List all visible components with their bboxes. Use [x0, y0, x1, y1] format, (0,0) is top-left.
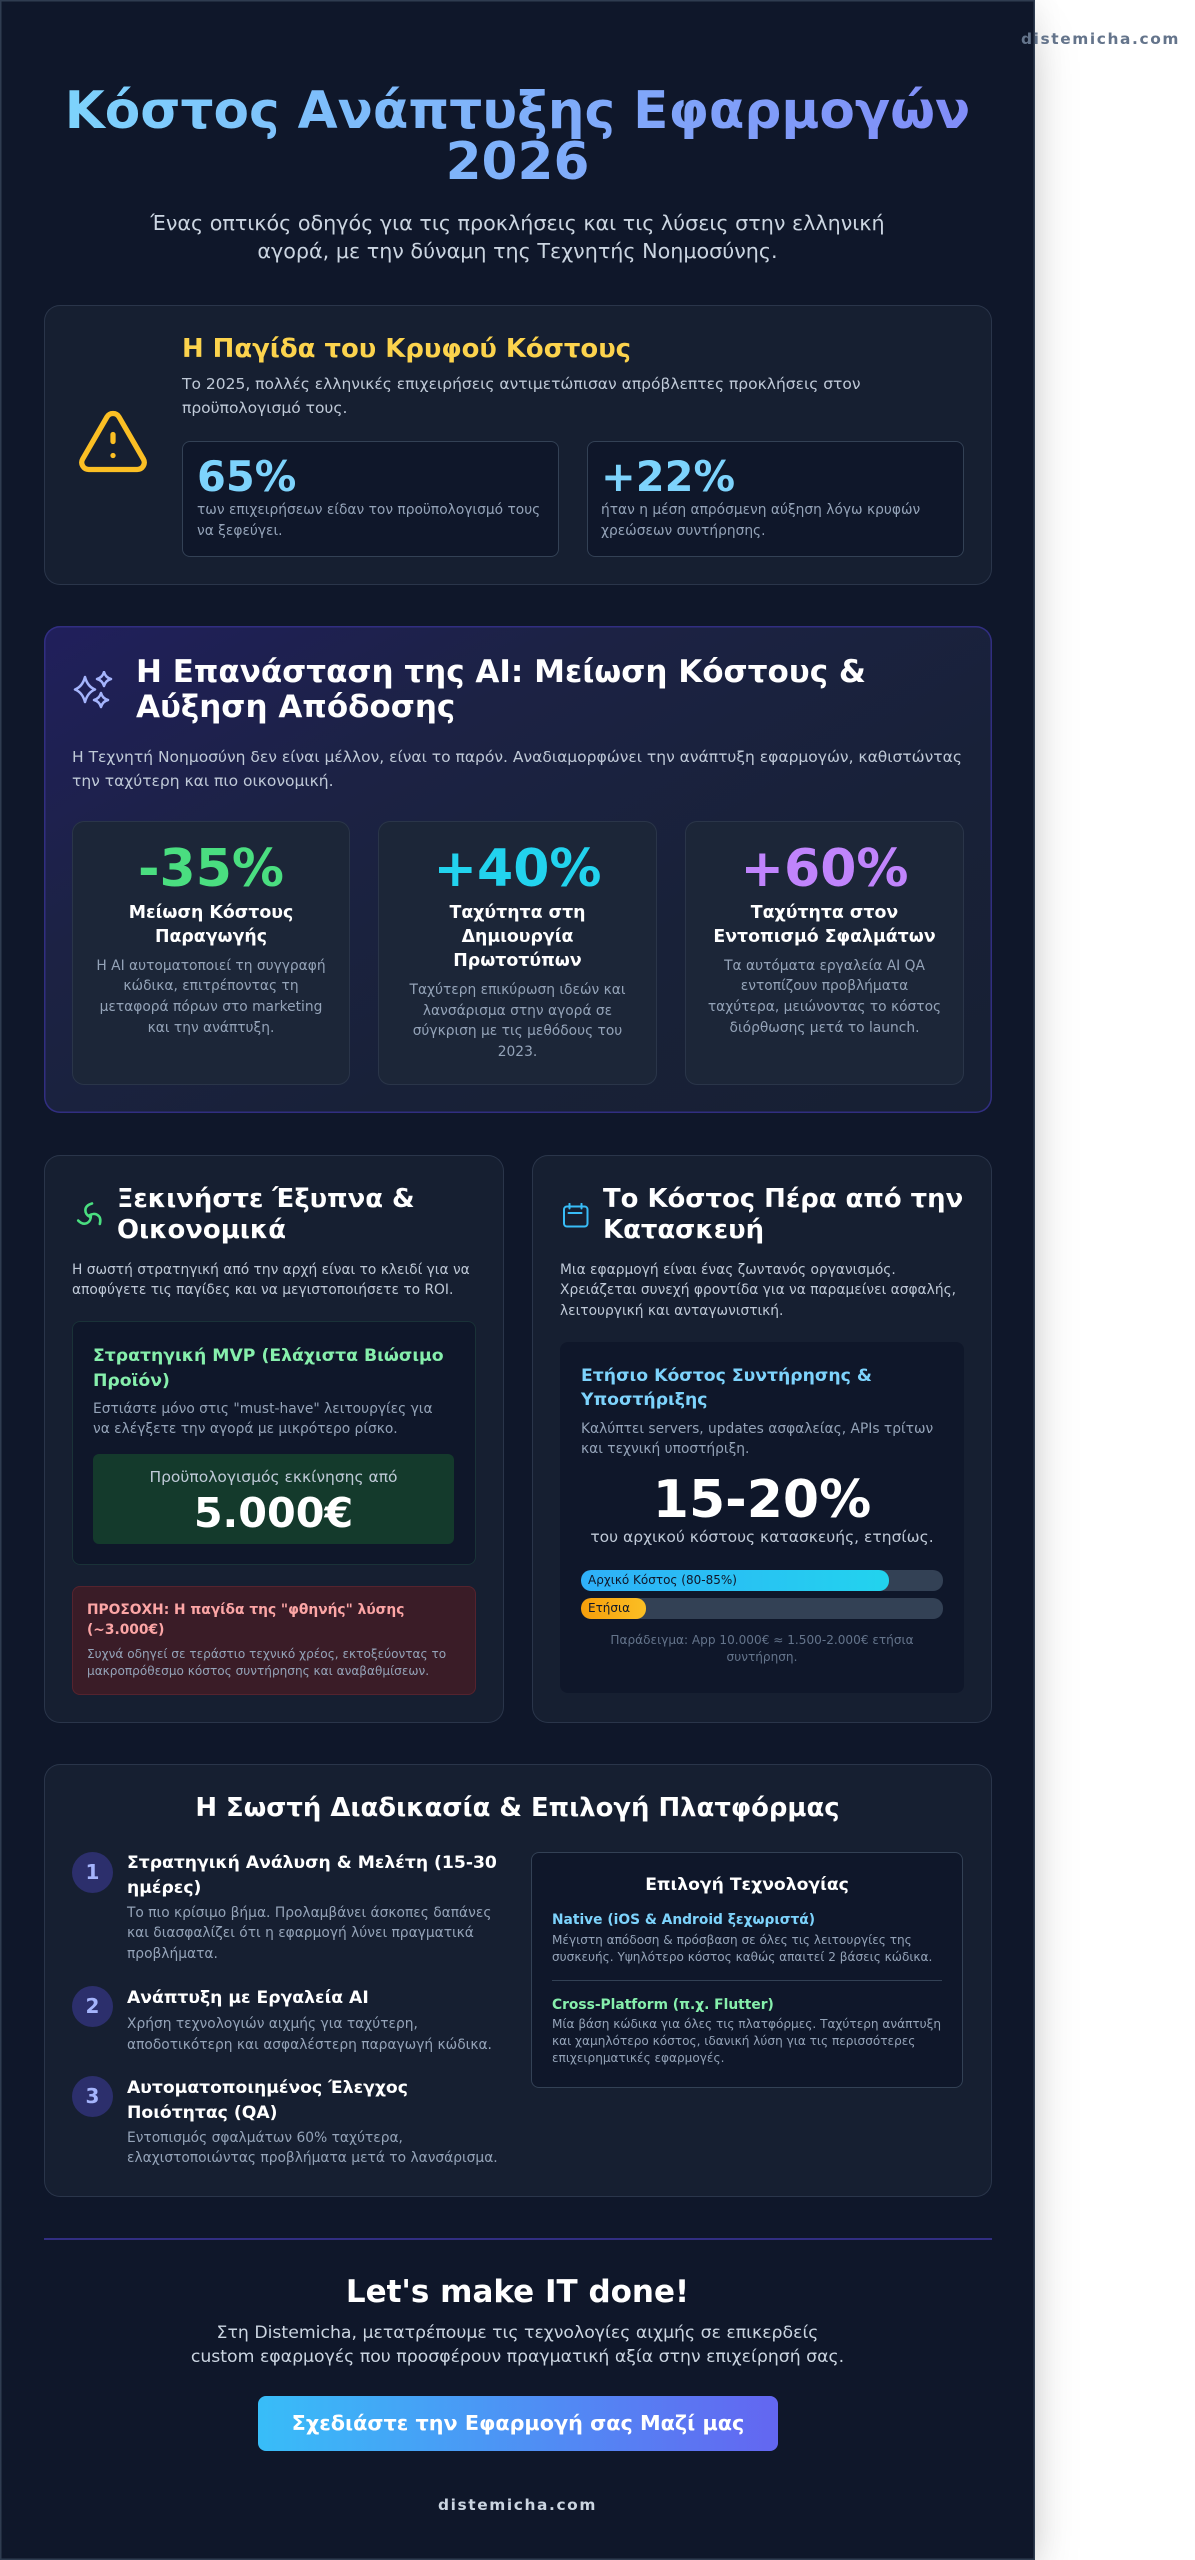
step title: Στρατηγική Ανάλυση & Μελέτη (15-30: [127, 1853, 497, 1873]
step description: αποδοτικότερη και ασφαλέστερη παραγωγή κώδικα.: [127, 2037, 492, 2053]
icon: fan swirl: [76, 1202, 102, 1226]
stat description: λανσάρισμα στην αγορά σε: [423, 1003, 612, 1019]
cta text: Στη Distemicha, μετατρέπουμε τις τεχνολογίες αιχμής σε επικερδείς: [217, 2322, 818, 2342]
icon: sparkles: [74, 671, 112, 708]
cta button: Σχεδιάστε την Εφαρμογή σας Μαζί μας: [292, 2411, 744, 2435]
text: annual cost description: [581, 1420, 933, 1457]
stat number: +22%: [601, 452, 735, 500]
step title: Αυτοματοποιημένος Έλεγχος: [127, 2078, 408, 2098]
warning heading: ΠΡΟΣΟΧΗ: Η παγίδα της "φθηνής" λύσης: [87, 1602, 404, 1618]
stat description: [708, 958, 941, 1036]
stat number: -35%: [138, 838, 284, 898]
stat label: Μείωση Κόστους: [129, 903, 293, 923]
title: 2026: [446, 132, 589, 192]
budget value: 5.000€: [194, 1489, 353, 1537]
stat description: μεταφορά πόρων στο marketing: [100, 999, 322, 1015]
stat description: [96, 958, 326, 1036]
stat card: prototyping speed: [378, 821, 657, 1085]
heading: cost beyond build: [603, 1184, 963, 1245]
title: Κόστος Ανάπτυξης Εφαρμογών: [65, 80, 970, 140]
heading: cost beyond build: Το Κόστος Πέρα από την: [603, 1184, 963, 1214]
step 2: [72, 1986, 492, 2053]
step title: Ποιότητας (QA): [127, 2103, 277, 2123]
stat description: σύγκριση με τις μεθόδους του: [413, 1023, 622, 1039]
stat card: bug detection speed: [685, 821, 964, 1085]
stat description: ταχύτερα, μειώνοντας το κόστος: [708, 999, 941, 1015]
text: strategy intro: [72, 1262, 470, 1298]
stat description: ήταν η μέση απρόσμενη αύξηση λόγω κρυφών: [601, 502, 920, 518]
stat description: Η AI αυτοματοποιεί τη συγγραφή: [96, 958, 326, 974]
stat card: cost reduction: [72, 821, 350, 1085]
icon: warning triangle: [79, 410, 147, 472]
bar fill: Ετήσια: [588, 1601, 630, 1615]
step title: Ανάπτυξη με Εργαλεία AI: [127, 1988, 369, 2008]
budget callout: [93, 1454, 454, 1544]
option title: cross-platform: Cross-Platform (π.χ. Flutter): [552, 1997, 774, 2013]
stat description: Τα αυτόματα εργαλεία AI QA: [724, 958, 925, 974]
text: annual cost description: Καλύπτει servers, updates ασφαλείας, APIs τρίτων: [581, 1420, 933, 1436]
step description: Εντοπισμός σφαλμάτων 60% ταχύτερα,: [127, 2130, 403, 2146]
budget label: Προϋπολογισμός εκκίνησης από: [149, 1468, 398, 1486]
heading: AI revolution: Η Επανάσταση της AI: Μείωση Κόστους &: [136, 654, 866, 690]
heading: cost beyond build: Κατασκευή: [603, 1215, 764, 1245]
option text: cross-platform: επιχειρηματικές εφαρμογές.: [552, 2051, 724, 2065]
warning heading: (~3.000€): [87, 1622, 164, 1638]
warning text: μακροπρόθεσμο κόστος συντήρησης και αναβαθμίσεων.: [87, 1664, 429, 1678]
footer brand: distemicha.com: [438, 2496, 597, 2514]
step description: ελαχιστοποιώντας προβλήματα μετά το λανσάρισμα.: [127, 2150, 498, 2166]
heading: annual cost: Υποστήριξης: [581, 1390, 707, 1410]
text: maintenance intro: λειτουργική και ανταγωνιστική.: [560, 1303, 783, 1319]
stat label: [713, 903, 936, 947]
heading: MVP: [93, 1346, 444, 1390]
caption: του αρχικού κόστους κατασκευής, ετησίως.: [590, 1528, 934, 1546]
step title: [127, 1853, 497, 1898]
heading: AI revolution: Αύξηση Απόδοσης: [136, 689, 455, 725]
panel: process and platform: [44, 1764, 992, 2197]
example note: [610, 1633, 914, 1664]
panel: hidden cost trap: [44, 305, 992, 585]
step description: [127, 2130, 498, 2166]
heading: start smart: Οικονομικά: [117, 1215, 286, 1245]
stat label: Πρωτοτύπων: [453, 951, 582, 971]
card: annual maintenance cost: [560, 1342, 964, 1693]
text: AI intro: την ταχύτερη και πιο οικονομική.: [72, 772, 334, 790]
text: MVP description: Εστιάστε μόνο στις "must-have" λειτουργίες για: [93, 1401, 433, 1417]
stat number: 65%: [197, 452, 296, 500]
option text: cross-platform: [552, 2017, 941, 2065]
text: annual cost description: και τεχνική υποστήριξη.: [581, 1441, 749, 1457]
heading: MVP: Στρατηγική MVP (Ελάχιστα Βιώσιμο: [93, 1346, 444, 1366]
step number: [72, 2076, 113, 2117]
cta heading: Let's make IT done!: [346, 2274, 689, 2310]
stat label: Παραγωγής: [155, 927, 267, 947]
stat description: 2023.: [498, 1044, 537, 1060]
option text: native: Μέγιστη απόδοση & πρόσβαση σε όλες τις λειτουργίες της: [552, 1933, 912, 1947]
step number: 1: [86, 1860, 99, 1884]
stat description: Ταχύτερη επικύρωση ιδεών και: [410, 982, 625, 998]
text: maintenance intro: Χρειάζεται συνεχή φροντίδα για να παραμείνει ασφαλής,: [560, 1282, 956, 1298]
warning text: Συχνά οδηγεί σε τεράστιο τεχνικό χρέος, εκτοξεύοντας το: [87, 1647, 446, 1661]
heading: annual cost: Ετήσιο Κόστος Συντήρησης &: [581, 1366, 872, 1386]
example note: συντήρηση.: [727, 1650, 797, 1664]
stat description: χρεώσεων συντήρησης.: [601, 523, 766, 539]
example note: Παράδειγμα: App 10.000€ ≈ 1.500-2.000€ ετήσια: [610, 1633, 914, 1647]
cta text: custom εφαρμογές που προσφέρουν πραγματική αξία στην επιχείρησή σας.: [191, 2346, 844, 2366]
bar: annual cost: [581, 1598, 943, 1618]
text: strategy intro: Η σωστή στρατηγική από την αρχή είναι το κλειδί για να: [72, 1262, 470, 1278]
bar fill: [581, 1570, 889, 1590]
stat description: και την ανάπτυξη.: [148, 1020, 274, 1036]
text: intro: Το 2025, πολλές ελληνικές επιχειρήσεις αντιμετώπισαν απρόβλεπτες προκλήσεις στον: [182, 375, 861, 393]
warning heading: [87, 1602, 404, 1638]
stat number: +60%: [740, 838, 909, 898]
stat number: +40%: [433, 838, 602, 898]
card: MVP strategy: [72, 1321, 476, 1565]
step description: [127, 2016, 492, 2053]
bar fill: [581, 1598, 646, 1618]
stat description: κώδικα, επιτρέποντας τη: [123, 978, 299, 994]
step 1: [72, 1852, 497, 1962]
icon: calendar: [563, 1203, 588, 1228]
stat label: Εντοπισμό Σφαλμάτων: [713, 927, 936, 947]
text: maintenance intro: Μια εφαρμογή είναι ένας ζωντανός οργανισμός.: [560, 1262, 896, 1278]
text: strategy intro: αποφύγετε τις παγίδες και να μεγιστοποιήσετε το ROI.: [72, 1282, 453, 1298]
heading: process and platform: Η Σωστή Διαδικασία & Επιλογή Πλατφόρμας: [195, 1793, 840, 1823]
option title: native: Native (iOS & Android ξεχωριστά): [552, 1912, 815, 1928]
text: maintenance intro: [560, 1262, 956, 1319]
stat label: [449, 903, 586, 971]
heading: hidden cost trap: Η Παγίδα του Κρυφού Κόστους: [182, 334, 631, 364]
stat description: [409, 982, 626, 1060]
option text: cross-platform: και χαμηλότερο κόστος, ιδανική λύση για τις περισσότερες: [552, 2034, 915, 2048]
step number: [72, 1986, 113, 2027]
subtitle: αγορά, με την δύναμη της Τεχνητής Νοημοσύνης.: [257, 239, 778, 263]
panel: start smart: [44, 1155, 504, 1723]
top-right brand: distemicha.com: [1021, 30, 1180, 48]
text: AI intro: [72, 748, 962, 790]
card: technology choice: [531, 1852, 963, 2088]
heading: technology choice: Επιλογή Τεχνολογίας: [645, 1875, 849, 1895]
heading: MVP: Προϊόν): [93, 1370, 170, 1390]
stat description: εντοπίζουν προβλήματα: [741, 978, 908, 994]
text: MVP description: [93, 1401, 433, 1437]
stat card: 65%: [182, 441, 559, 557]
cta text: [191, 2322, 844, 2366]
subtitle: [150, 211, 885, 263]
step description: προβλήματα.: [127, 1946, 218, 1962]
bar: initial cost: [581, 1570, 943, 1590]
heading: AI revolution: [136, 654, 866, 725]
option text: native: [552, 1933, 932, 1964]
big number: 15-20%: [653, 1470, 871, 1530]
stat label: [129, 903, 293, 947]
step number: [72, 1852, 113, 1893]
option text: cross-platform: Μία βάση κώδικα για όλες τις πλατφόρμες. Ταχύτερη ανάπτυξη: [552, 2017, 941, 2031]
title: [56, 86, 979, 188]
stat description: διόρθωσης μετά το launch.: [730, 1020, 919, 1036]
cta button: [258, 2396, 778, 2451]
panel: cost beyond build: [532, 1155, 992, 1723]
stat description: [197, 502, 540, 539]
text: MVP description: να ελέγξετε την αγορά με μικρότερο ρίσκο.: [93, 1421, 398, 1437]
option text: native: συσκευής. Υψηλότερο κόστος καθώς απαιτεί 2 βάσεις κώδικα.: [552, 1950, 932, 1964]
panel: AI revolution: [44, 626, 992, 1113]
heading: start smart: [117, 1184, 415, 1245]
step number: 2: [86, 1994, 99, 2018]
heading: start smart: Ξεκινήστε Έξυπνα &: [117, 1184, 415, 1214]
text: intro: προϋπολογισμό τους.: [182, 399, 347, 417]
step title: [127, 2078, 408, 2123]
stat label: Ταχύτητα στον: [751, 903, 898, 923]
bar fill: Αρχικό Κόστος (80-85%): [588, 1573, 737, 1587]
heading: annual cost: [580, 1366, 872, 1410]
stat description: των επιχειρήσεων είδαν τον προϋπολογισμό τους: [197, 502, 540, 518]
step description: Χρήση τεχνολογιών αιχμής για ταχύτερη,: [127, 2016, 418, 2032]
text: intro: [182, 375, 861, 417]
warning text: [87, 1647, 446, 1678]
stat label: Δημιουργία: [462, 927, 573, 947]
step number: 3: [86, 2084, 99, 2108]
step description: και διασφαλίζει ότι η εφαρμογή λύνει πραγματικά: [127, 1925, 474, 1941]
step 3: [72, 2076, 498, 2166]
stat description: να ξεφεύγει.: [197, 523, 283, 539]
step description: Το πιο κρίσιμο βήμα. Προλαμβάνει άσκοπες δαπάνες: [127, 1905, 491, 1921]
step description: [126, 1905, 491, 1962]
text: AI intro: Η Τεχνητή Νοημοσύνη δεν είναι μέλλον, είναι το παρόν. Αναδιαμορφώνει την ανάπτυξη εφαρμογών, καθιστώντας: [72, 748, 962, 766]
subtitle: Ένας οπτικός οδηγός για τις προκλήσεις και τις λύσεις στην ελληνική: [150, 211, 885, 235]
stat label: Ταχύτητα στη: [449, 903, 586, 923]
callout: warning: [72, 1586, 476, 1694]
stat description: [601, 502, 920, 539]
step title: ημέρες): [127, 1878, 201, 1898]
stat card: +22%: [587, 441, 964, 557]
